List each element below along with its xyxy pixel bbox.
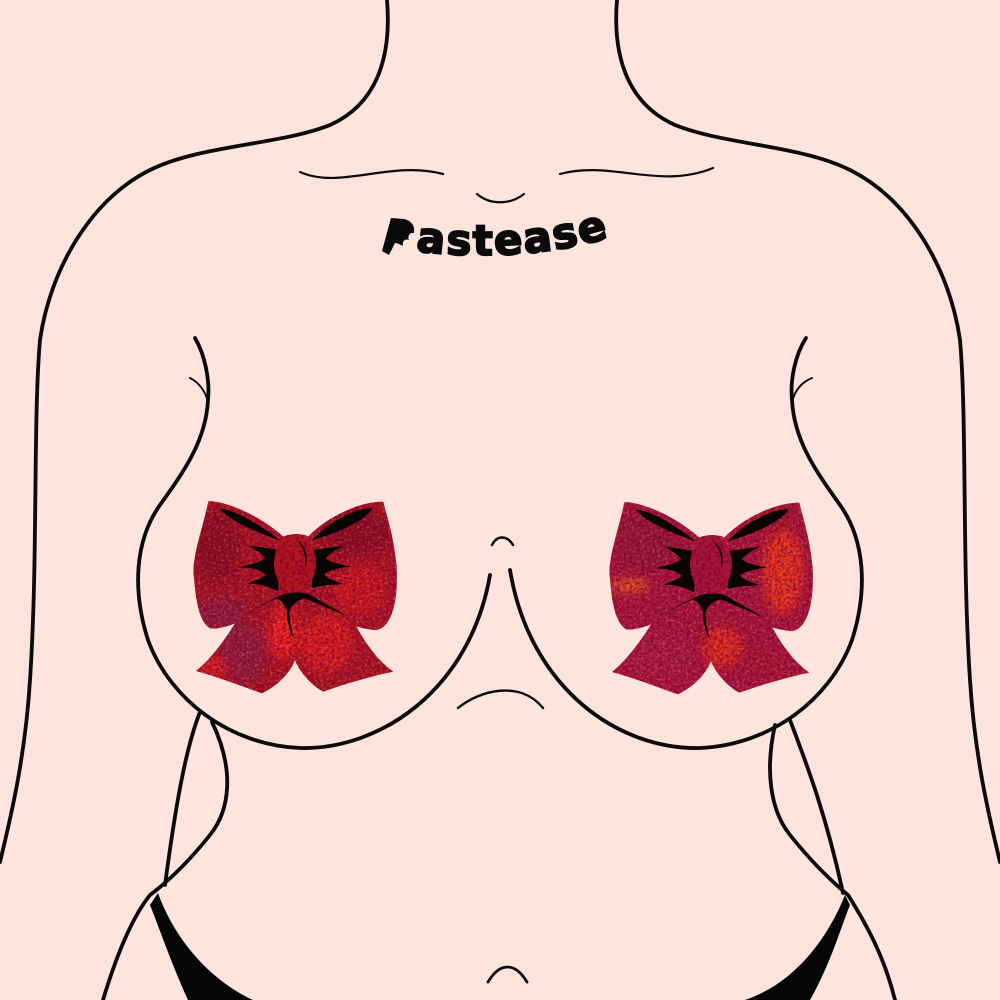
- navel: [488, 967, 527, 982]
- left chest contour: [138, 338, 490, 748]
- right shoulder and arm line: [616, 0, 1000, 862]
- right bow knot crease: [713, 540, 723, 569]
- left inner waist line: [165, 712, 200, 885]
- neck notch: [477, 194, 524, 202]
- left underarm crease: [190, 378, 208, 402]
- right bow knot: [690, 535, 732, 592]
- logo: [382, 217, 607, 256]
- right bow: [609, 502, 813, 694]
- left shoulder and arm line: [0, 0, 388, 862]
- right bow black details: [635, 509, 789, 641]
- logo P mark: [382, 218, 414, 255]
- logo wordmark: astease: [417, 217, 607, 256]
- right outer waist line: [770, 725, 895, 1000]
- left bow knot crease: [297, 539, 307, 568]
- right chest contour: [510, 338, 862, 748]
- left collarbone: [300, 170, 443, 178]
- left bow knot: [274, 534, 316, 592]
- left outer waist line: [103, 722, 227, 1000]
- left bow fill: [193, 501, 397, 694]
- right black waistband: [745, 895, 850, 1000]
- right collarbone: [560, 168, 713, 176]
- right underarm crease: [792, 378, 812, 402]
- right bow fill: [609, 502, 813, 694]
- right inner waist line: [790, 720, 843, 893]
- center crease: [492, 538, 513, 545]
- left black waistband: [150, 893, 253, 1000]
- left bow: [193, 501, 397, 694]
- sternum arc: [458, 691, 543, 708]
- left bow black details: [219, 508, 373, 640]
